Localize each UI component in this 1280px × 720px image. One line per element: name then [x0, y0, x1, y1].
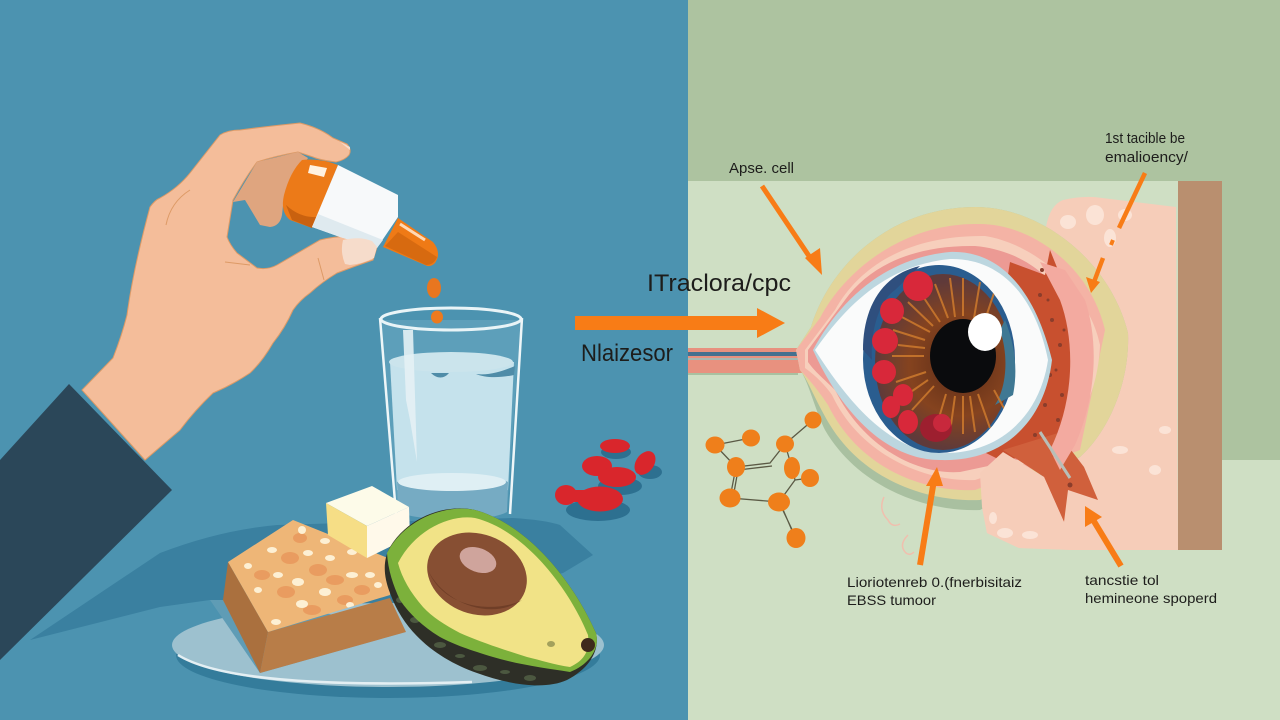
left background panel	[0, 0, 688, 720]
dropper bottle	[283, 160, 438, 266]
label: bottom centre line 2: EBSS tumoor	[847, 592, 936, 608]
right background main panel	[688, 181, 1280, 720]
ring peach	[805, 236, 1100, 480]
right background top band	[688, 0, 1280, 460]
peach fold	[1040, 262, 1094, 470]
label: bottom right line 2: hemineone spoperd	[1085, 590, 1217, 606]
avocado flesh	[398, 517, 588, 667]
pupil	[930, 319, 996, 393]
ring pink	[796, 224, 1105, 490]
brown strip	[1178, 181, 1222, 550]
dark red crescent tissue	[980, 250, 1085, 460]
label: main arrow lower: Nlaizesor	[581, 340, 673, 367]
pink tissue mass	[980, 197, 1178, 550]
eye	[796, 207, 1128, 522]
arrow: bottom centre	[920, 467, 943, 565]
tissue overlapping lower ring	[980, 452, 1073, 550]
iris	[863, 265, 1015, 453]
arrow: apse cell	[762, 186, 822, 275]
surgical needle	[1040, 432, 1070, 478]
glass of water	[380, 308, 522, 520]
avocado flesh rim	[387, 509, 597, 672]
arrow: top right	[1086, 173, 1145, 293]
iris rays	[892, 278, 1005, 434]
thumb nail	[342, 238, 377, 265]
plate	[172, 600, 604, 698]
bottle label	[312, 165, 398, 248]
left vessel	[688, 348, 806, 375]
inner fingers	[233, 152, 308, 227]
dark red wedge	[1003, 433, 1098, 522]
toast crumbs	[244, 526, 382, 625]
pale squiggles	[882, 497, 914, 554]
drops	[427, 278, 443, 324]
butter	[326, 486, 410, 558]
hand	[82, 123, 377, 460]
label: top right line 2: emalioency/	[1105, 149, 1189, 166]
sleeve	[0, 384, 172, 660]
label: top right line 1: 1st tacible be	[1105, 130, 1185, 147]
outer ring beige	[796, 207, 1128, 500]
sclera blue edge	[813, 252, 1052, 460]
toast	[223, 520, 406, 673]
bottle tip	[383, 218, 438, 266]
red pills	[555, 439, 662, 521]
sclera white	[815, 259, 1048, 453]
avocado seed	[415, 519, 539, 629]
crease lines	[166, 190, 324, 280]
label: bottom right line 1: tancstie tol	[1085, 572, 1159, 588]
ring rose	[808, 246, 1085, 472]
table shadow	[30, 518, 593, 640]
tissue speckles	[1060, 205, 1171, 475]
red blood cells	[872, 271, 952, 442]
label: bottom centre line 1: Lioriotenreb 0.(fnerbisitaiz	[847, 574, 1022, 590]
main arrow	[575, 308, 785, 338]
bottle cap	[283, 160, 338, 228]
outer ring grey	[796, 207, 1128, 510]
lower tissue speckles	[989, 512, 1038, 539]
arrow: bottom right	[1085, 506, 1121, 566]
label: apse cell: Apse. cell	[729, 160, 794, 177]
pupil highlight	[968, 313, 1002, 351]
label: main arrow upper: ITraclora/cpc	[647, 270, 791, 297]
avocado	[385, 508, 597, 685]
molecule	[706, 412, 822, 548]
